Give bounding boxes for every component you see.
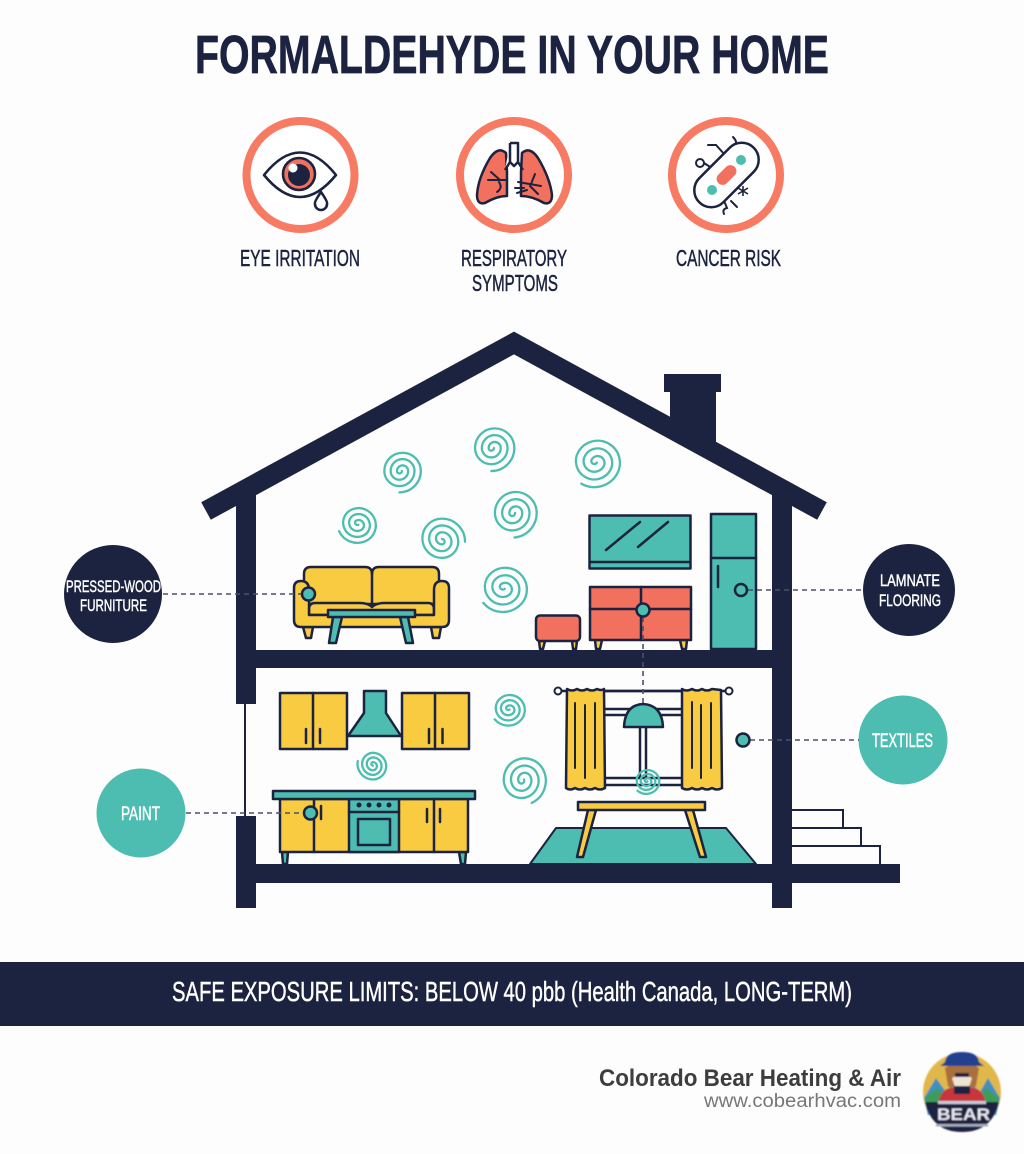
kitchen counter (273, 791, 475, 864)
callout: pressed-wood furniture: FURNITURE (80, 596, 147, 615)
callout: pressed-wood furniture: PRESSED-WOOD (66, 577, 161, 596)
footer: company name: Colorado Bear Heating & Air (599, 1065, 901, 1092)
label: respiratory symptoms: RESPIRATORY (461, 245, 567, 271)
window (554, 688, 732, 785)
icon: cancer cell (672, 121, 780, 229)
ottoman (536, 616, 580, 649)
footer: website: www.cobearhvac.com (703, 1091, 901, 1112)
sofa (294, 567, 449, 638)
label: respiratory symptoms (461, 245, 567, 296)
red cabinet (590, 587, 691, 649)
icon: eye irritation (246, 121, 354, 229)
label: cancer risk: CANCER RISK (676, 245, 781, 271)
icon: company logo (923, 1052, 1001, 1132)
lamp (624, 704, 663, 727)
coffee table (328, 610, 415, 643)
callout: paint: PAINT (121, 804, 160, 825)
TV (590, 516, 690, 568)
callout: textiles: TEXTILES (872, 731, 933, 752)
callout: cabinet dot (636, 604, 650, 704)
icon: company logo: BEAR (937, 1105, 990, 1124)
panel: health effects (240, 121, 781, 296)
banner: safe exposure limits (0, 962, 1024, 1026)
rug (530, 828, 756, 864)
label: eye irritation: EYE IRRITATION (240, 245, 360, 271)
fridge (711, 514, 756, 649)
stairs (792, 810, 880, 864)
formaldehyde spirals (333, 428, 628, 810)
callout: laminate flooring: FLOORING (879, 591, 941, 610)
small spiral at window (630, 765, 664, 799)
callout: laminate flooring (735, 544, 955, 636)
callout: laminate flooring: LAMNATE (880, 571, 940, 590)
icon: lungs (460, 121, 568, 229)
dining table (577, 802, 706, 857)
label: respiratory symptoms: SYMPTOMS (472, 270, 558, 296)
house structure (206, 343, 900, 908)
curtains (566, 689, 722, 790)
upper cabinets (280, 693, 469, 749)
callout: paint (96, 768, 317, 858)
callout: pressed-wood furniture (64, 545, 315, 643)
range hood (348, 691, 401, 736)
callout: textiles (736, 696, 948, 784)
